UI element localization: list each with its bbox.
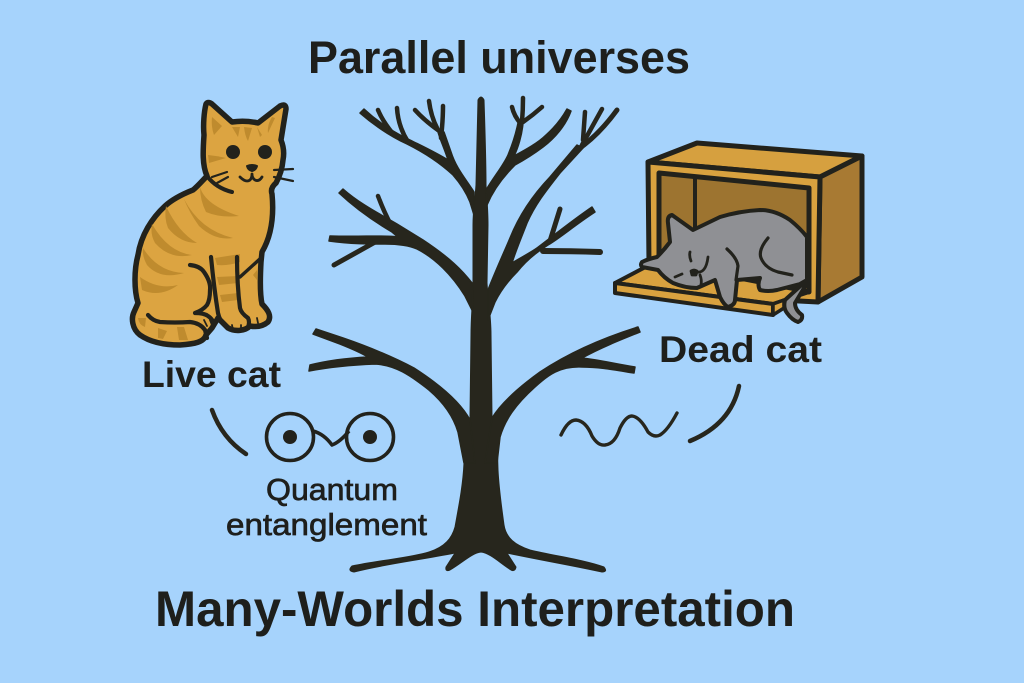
box right side xyxy=(818,156,862,302)
cat body xyxy=(132,102,286,345)
lower right branch xyxy=(485,327,640,463)
cat face lines xyxy=(148,165,293,338)
tree xyxy=(309,97,640,572)
footer title: Many-Worlds Interpretation: Many-Worlds Interpretation xyxy=(155,581,795,637)
cat eyes xyxy=(226,145,240,159)
arc: right xyxy=(690,386,739,441)
box interior xyxy=(659,173,809,292)
upper left branch xyxy=(360,109,474,215)
label: Quantum entanglement: entanglement xyxy=(226,507,427,542)
box top xyxy=(648,143,862,177)
grey cat xyxy=(641,210,807,322)
icon: wave xyxy=(561,413,677,445)
label: Quantum entanglement xyxy=(226,472,427,542)
cat stripes xyxy=(138,117,275,340)
icon: box with dead cat xyxy=(615,143,862,322)
icon: live cat xyxy=(132,102,293,345)
label: Quantum entanglement: Quantum xyxy=(266,472,398,507)
grey cat lines xyxy=(675,238,792,285)
arc: left xyxy=(212,410,246,454)
flap xyxy=(615,262,809,304)
middle right branch xyxy=(488,145,595,320)
label: Live cat: Live cat xyxy=(142,354,281,395)
middle left branch xyxy=(329,189,473,312)
icon: entangled particles xyxy=(266,414,394,460)
lower left branch xyxy=(309,329,475,463)
trunk and roots xyxy=(350,97,606,572)
label: Dead cat: Dead cat xyxy=(659,329,822,370)
box front frame xyxy=(648,162,820,302)
heading: Parallel universes: Parallel universes xyxy=(308,32,690,83)
upper right branch xyxy=(486,109,571,205)
